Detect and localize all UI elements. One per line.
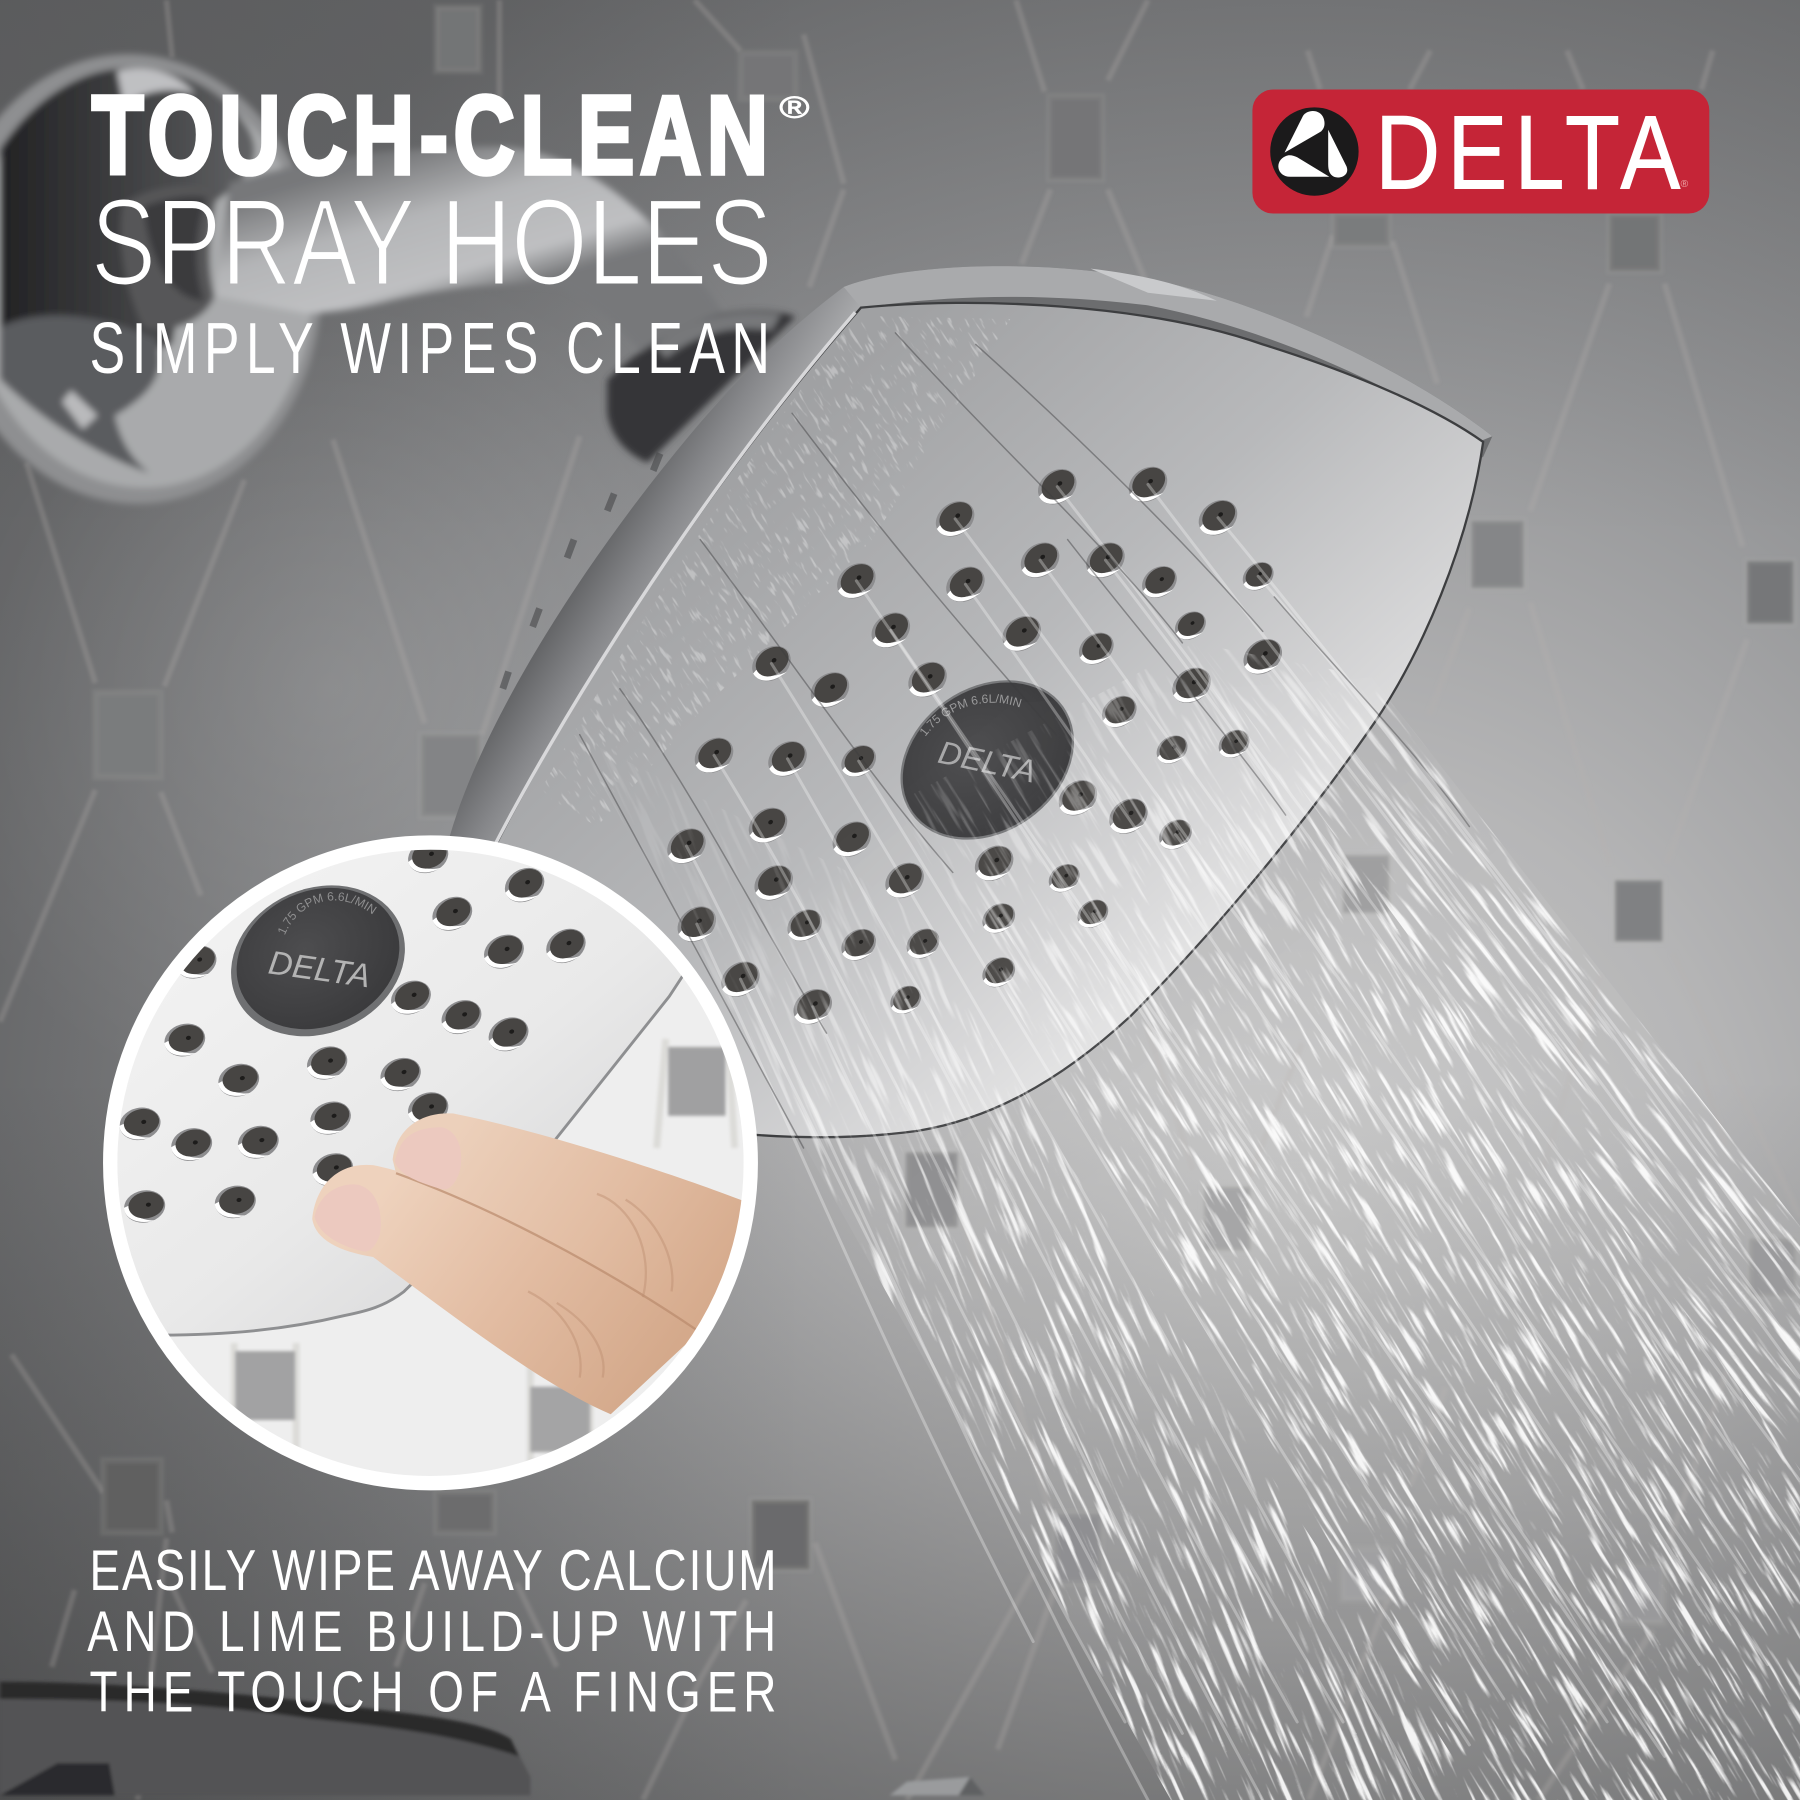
logo registered mark: ® <box>1681 179 1689 190</box>
caption line 3: THE TOUCH OF A FINGER <box>90 1661 776 1725</box>
water spray streaks <box>574 643 1800 1800</box>
head badge: DELTA <box>935 734 1039 790</box>
inset white ring <box>110 843 751 1483</box>
inset badge <box>231 885 405 1036</box>
title line: Touch-Clean: TOUCH-CLEAN <box>92 72 768 197</box>
caption line 1: EASILY WIPE AWAY CALCIUM <box>90 1539 776 1603</box>
title <box>90 72 810 389</box>
inset badge: DELTA <box>266 945 373 995</box>
head badge: 1.75 GPM 6.6L/MIN <box>920 694 1022 736</box>
upper finger <box>393 1113 746 1329</box>
caption line 2: AND LIME BUILD-UP WITH <box>87 1600 776 1664</box>
droplet marks on face <box>540 316 1010 827</box>
head bevel <box>448 266 1492 855</box>
registered mark: ® <box>779 90 810 125</box>
subtitle: SIMPLY WIPES CLEAN <box>90 308 770 389</box>
water strands from the spray holes <box>580 333 1800 1800</box>
spray holes <box>660 459 1289 1032</box>
inset wall tiles <box>170 978 744 1476</box>
inset circle: fingers wiping spray holes <box>103 835 758 1490</box>
inset badge: 1.75 GPM 6.6L/MIN <box>278 892 377 934</box>
flange dark reflection <box>0 69 255 352</box>
lower finger <box>312 1165 712 1414</box>
head face <box>494 303 1483 1137</box>
flange body <box>0 41 337 517</box>
flange bright patch <box>117 69 195 106</box>
inset shower face <box>168 965 683 1336</box>
logo wordmark: DELTA <box>1375 94 1680 211</box>
neck with thread <box>607 311 796 463</box>
wall flange and shower arm <box>0 41 796 517</box>
caption <box>87 1539 776 1725</box>
logo mark <box>1270 107 1359 196</box>
inset spray holes <box>116 834 592 1226</box>
flange lower chrome <box>0 315 160 473</box>
shower head <box>450 266 1492 1138</box>
arm collar <box>121 186 218 329</box>
title line: Spray Holes: SPRAY HOLES <box>91 175 773 312</box>
tub spout at bottom <box>0 1682 985 1795</box>
head badge <box>900 680 1074 840</box>
arm <box>215 147 723 367</box>
Delta logo <box>1252 90 1709 214</box>
